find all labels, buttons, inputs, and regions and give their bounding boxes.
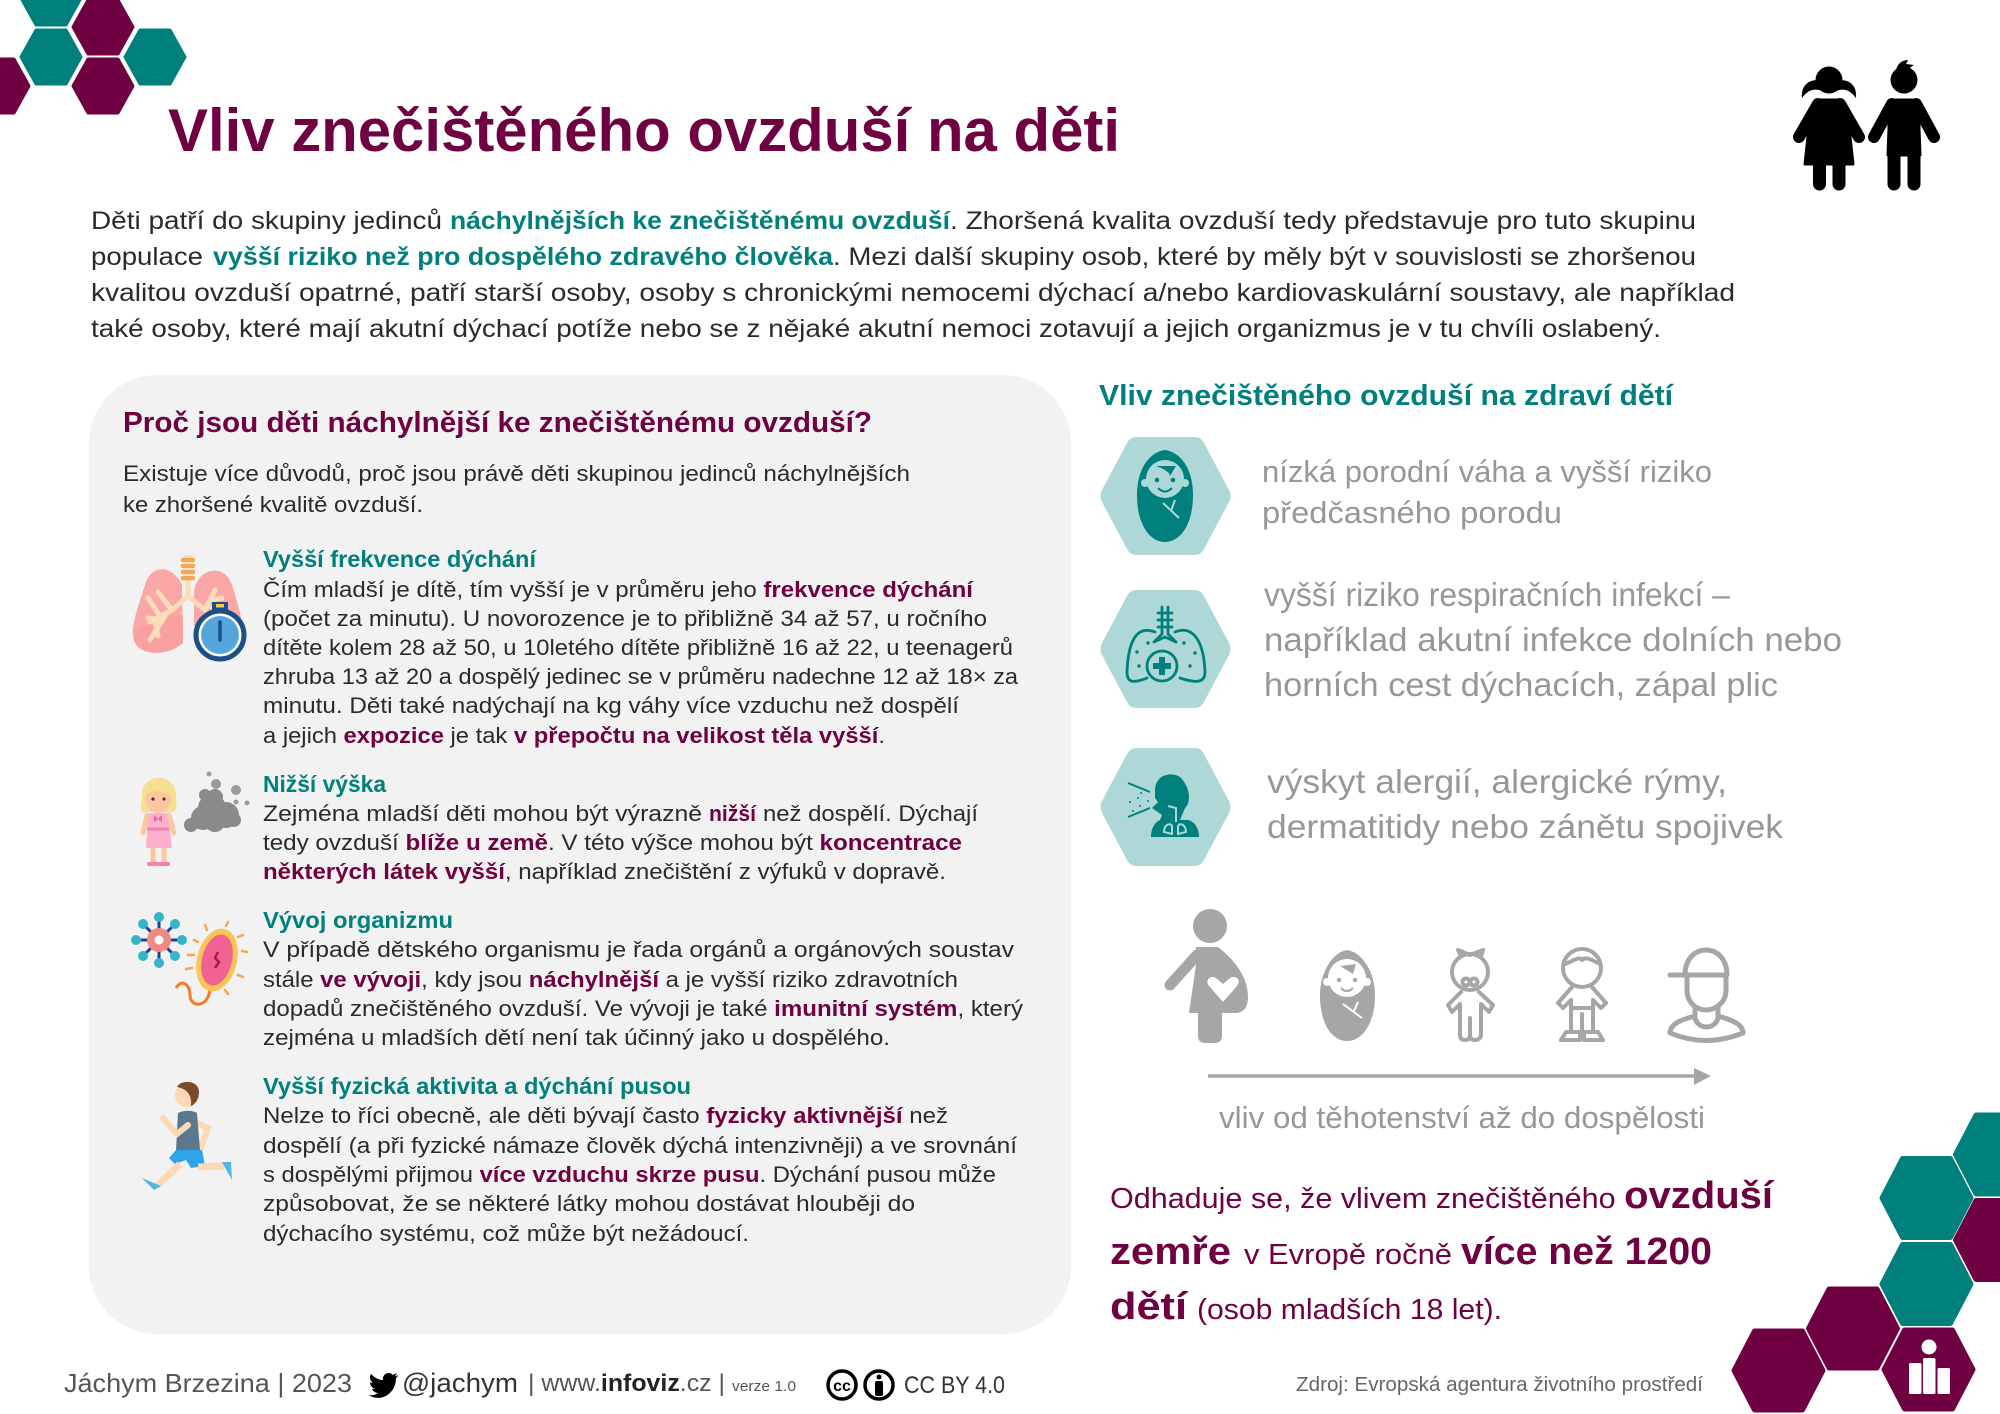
icon: hexagon with baby	[1100, 437, 1230, 555]
icon: girl and smog	[141, 772, 250, 864]
section 2 text: Zejména mladší děti mohou být výrazně	[263, 801, 702, 826]
panel intro	[123, 461, 910, 517]
text: allergies: dermatitidy nebo zánětu spojivek	[1267, 808, 1784, 845]
callout: estimated deaths	[1110, 1175, 1775, 1328]
text: low birth weight: nízká porodní váha a vyšší riziko	[1262, 454, 1712, 489]
icon: pregnant woman	[1170, 909, 1248, 1043]
section 4 text: způsobovat, že se některé látky mohou dostávat hlouběji do	[263, 1191, 915, 1216]
callout: estimated deaths: zemře	[1110, 1231, 1231, 1273]
section 4 text: Vyšší fyzická aktivita a dýchání pusou	[263, 1073, 691, 1099]
arrow caption: vliv od těhotenství až do dospělosti	[1219, 1100, 1705, 1135]
section 2 text: nižší	[709, 801, 757, 826]
section 2 text: Nižší výška	[263, 771, 386, 797]
intro text: vyšší riziko než pro dospělého zdravého člověka	[213, 243, 834, 271]
section 1 text	[263, 546, 1019, 748]
icon: virus and bacterium	[131, 912, 247, 1004]
icon: boy	[1558, 949, 1606, 1040]
section 4 text: s dospělými přijmou více vzduchu skrze pusu . Dýchání pusou může	[263, 1162, 996, 1187]
icon: twitter	[368, 1373, 398, 1398]
section 3 text	[263, 907, 1024, 1050]
section 3 text: V případě dětského organismu je řada orgánů a orgánových soustav	[263, 937, 1015, 962]
section 1 text: Čím mladší je dítě, tím vyšší je v průměru jeho frekvence dýchání	[263, 577, 974, 602]
section 3 text: Vývoj organizmu	[263, 907, 453, 933]
panel heading: Proč jsou děti náchylnější ke znečištěnému ovzduší?	[123, 407, 872, 439]
footer: author: Jáchym Brzezina | 2023	[64, 1368, 352, 1398]
section 4 text: dospělí (a při fyzické námaze člověk dýchá intenzivněji) a ve srovnání	[263, 1133, 1018, 1158]
intro text: . Zhoršená kvalita ovzduší tedy představuje pro tuto skupinu	[950, 207, 1696, 235]
section 2 text: než dospělí. Dýchají	[763, 801, 979, 826]
footer: website: | www.infoviz.cz | verze 1.0	[528, 1370, 796, 1397]
callout: estimated deaths: (osob mladších 18 let).	[1197, 1294, 1502, 1326]
intro text: náchylnějších ke znečištěnému ovzduší	[450, 207, 951, 235]
section 1 text: Vyšší frekvence dýchání	[263, 546, 538, 572]
callout: estimated deaths: dětí	[1110, 1286, 1189, 1328]
callout: estimated deaths: v Evropě ročně	[1244, 1239, 1452, 1271]
intro text: populace	[91, 243, 203, 271]
text: respiratory infections	[1264, 576, 1842, 703]
icon: hexagon with inhaling person	[1100, 748, 1230, 866]
intro text: . Mezi další skupiny osob, které by měly být v souvislosti se zhoršenou	[833, 243, 1696, 271]
section 4 text: dýchacího systému, což může být nežádoucí.	[263, 1221, 749, 1246]
section 2 text: některých látek vyšší , například znečištění z výfuků v dopravě.	[263, 859, 946, 884]
icon: swaddled baby	[1320, 950, 1375, 1041]
icon: hexagon with lungs	[1100, 590, 1230, 708]
icon: infographic logo	[1909, 1340, 1950, 1394]
text: low birth weight: předčasného porodu	[1262, 495, 1562, 530]
icon: lungs and stopwatch	[133, 555, 244, 659]
section 3 text: stále ve vývoji , kdy jsou náchylnější a je vyšší riziko zdravotních	[263, 967, 958, 992]
section 1 text: a jejich expozice je tak v přepočtu na velikost těla vyšší .	[263, 723, 885, 748]
panel intro: Existuje více důvodů, proč jsou právě děti skupinou jedinců náchylnějších	[123, 461, 910, 486]
section 4 text	[263, 1073, 1018, 1246]
icon: running boy	[142, 1082, 232, 1190]
footer: licence: CC BY 4.0	[904, 1372, 1005, 1399]
section 2 text	[263, 771, 979, 884]
callout: estimated deaths: více než 1200	[1461, 1231, 1712, 1273]
title: Vliv znečištěného ovzduší na děti	[168, 97, 1120, 164]
decorative hexagons: bottom right	[1734, 1115, 2000, 1410]
decorative hexagons: top left	[0, 0, 185, 113]
text: allergies: výskyt alergií, alergické rýmy,	[1267, 763, 1727, 800]
section 2 text: tedy ovzduší blíže u země . V této výšce mohou být koncentrace	[263, 830, 962, 855]
right heading: Vliv znečištěného ovzduší na zdraví dětí	[1099, 380, 1674, 412]
section 1 text: (počet za minutu). U novorozence je to přibližně 34 až 57, u ročního	[263, 606, 987, 631]
section 1 text: zhruba 13 až 20 a dospělý jedinec se v průměru nadechne 12 až 18× za	[263, 664, 1019, 689]
section 4 text: Nelze to říci obecně, ale děti bývají často fyzicky aktivnější než	[263, 1103, 948, 1128]
intro text: Děti patří do skupiny jedinců	[91, 207, 442, 235]
icon: children	[1799, 60, 1934, 184]
text: respiratory infections: například akutní infekce dolních nebo	[1264, 621, 1842, 658]
section 3 text: zejména u mladších dětí není tak účinný jako u dospělého.	[263, 1025, 890, 1050]
section 1 text: minutu. Děti také nadýchají na kg váhy více vzduchu než dospělí	[263, 693, 960, 718]
icon: creative commons	[828, 1371, 893, 1399]
icon: baby girl	[1448, 950, 1493, 1040]
text: respiratory infections: vyšší riziko respiračních infekcí –	[1264, 576, 1731, 613]
panel: why children are more susceptible	[89, 375, 1071, 1334]
arrow: from pregnancy to adulthood	[1208, 1068, 1711, 1085]
panel intro: ke zhoršené kvalitě ovzduší.	[123, 492, 423, 517]
source: Zdroj: Evropská agentura životního prostředí	[1296, 1374, 1703, 1396]
text: respiratory infections: horních cest dýchacích, zápal plic	[1264, 666, 1778, 703]
intro text: také osoby, které mají akutní dýchací potíže nebo se z nějaké akutní nemoci zotavují a jejich organizmus je v tu chvíli oslabený.	[91, 315, 1661, 343]
text: allergies	[1267, 763, 1784, 845]
icon: creative commons: cc	[833, 1378, 851, 1395]
intro text	[91, 207, 1735, 343]
footer: handle: @jachym	[402, 1368, 518, 1398]
intro text: kvalitou ovzduší opatrné, patří starší osoby, osoby s chronickými nemocemi dýchací a/nebo kardiovaskulární soustavy, ale například	[91, 279, 1735, 307]
section 3 text: dopadů znečištěného ovzduší. Ve vývoji je také imunitní systém , který	[263, 996, 1024, 1021]
text: low birth weight	[1262, 454, 1712, 530]
icon: teenager with cap	[1670, 950, 1743, 1040]
callout: estimated deaths: Odhaduje se, že vlivem znečištěného ovzduší	[1110, 1175, 1775, 1217]
section 1 text: dítěte kolem 28 až 50, u 10letého dítěte přibližně 16 až 22, u teenagerů	[263, 635, 1013, 660]
